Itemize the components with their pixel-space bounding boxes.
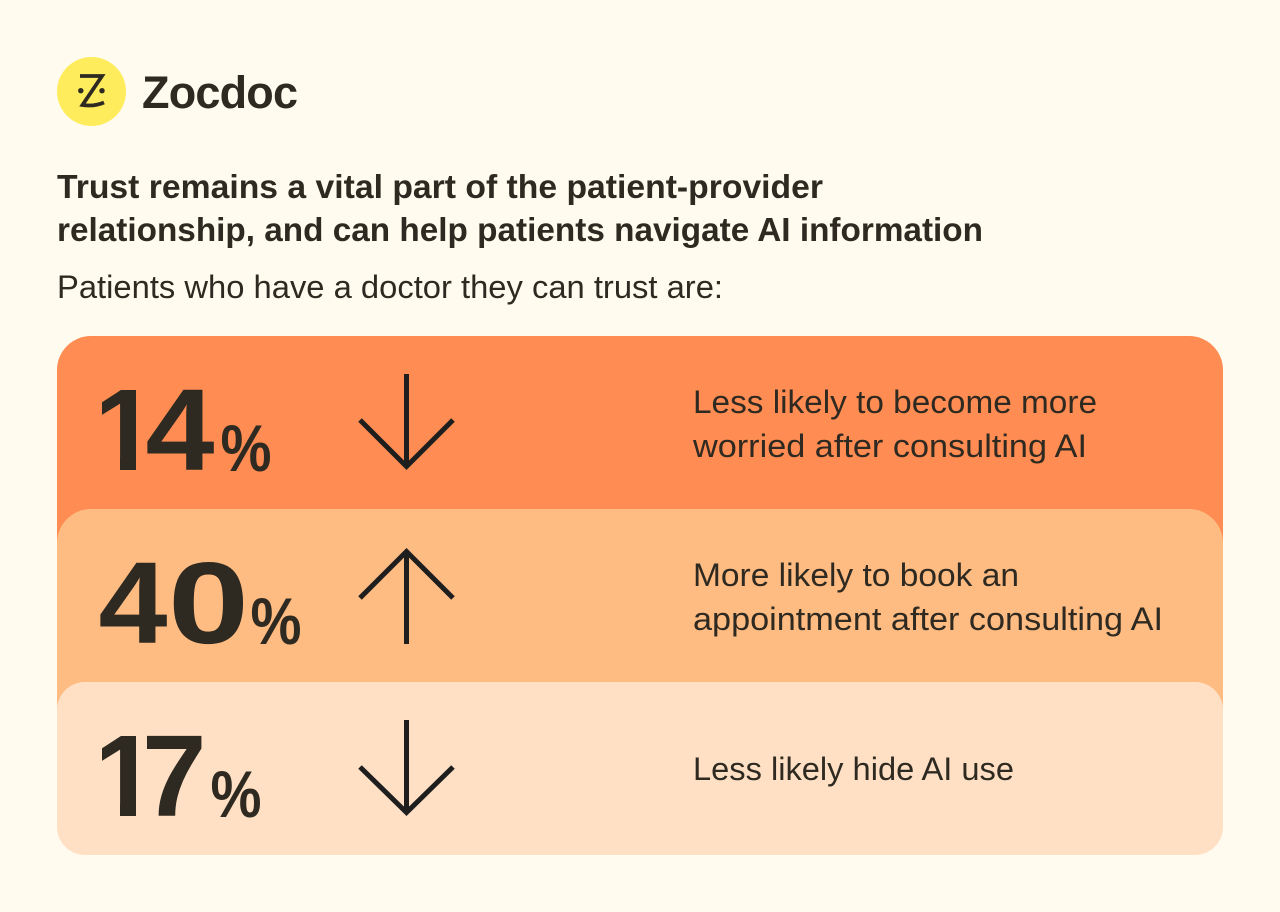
description: worried after consulting AI bbox=[692, 428, 1087, 464]
icon: down arrow bbox=[360, 374, 453, 467]
subheading: Patients who have a doctor they can trust are: bbox=[57, 269, 723, 305]
stat: 17%: 7 bbox=[142, 711, 207, 841]
description bbox=[693, 557, 1163, 637]
panel: 40% more likely to book an appointment bbox=[57, 509, 1223, 769]
heading: Trust remains a vital part of the patient-provider bbox=[57, 169, 823, 206]
logo: Zocdoc bbox=[57, 57, 298, 126]
stat: 17% bbox=[102, 736, 260, 818]
stat: 14%: 1 bbox=[93, 365, 158, 495]
icon: yellow smiley Z circle bbox=[57, 57, 126, 126]
description: appointment after consulting AI bbox=[693, 601, 1163, 637]
wordmark: Zocdoc bbox=[142, 67, 298, 118]
description: More likely to book an bbox=[693, 557, 1019, 593]
stat: 14%: % bbox=[220, 411, 272, 485]
description: Less likely hide AI use bbox=[693, 751, 1014, 787]
heading bbox=[57, 169, 983, 249]
stat: 17%: 1 bbox=[93, 711, 158, 841]
stat: 14% bbox=[102, 390, 270, 472]
stat: 40%: % bbox=[250, 584, 302, 658]
stat: 40% bbox=[98, 538, 302, 668]
heading: relationship, and can help patients navigate AI information bbox=[57, 212, 983, 249]
stat: 17%: % bbox=[210, 757, 262, 831]
stat: 40%: 0 bbox=[168, 538, 249, 668]
icon: up arrow bbox=[360, 551, 453, 644]
stat: 40%: 4 bbox=[98, 538, 168, 668]
panel: 14% less likely to become more worried bbox=[57, 336, 1223, 542]
description: Less likely to become more bbox=[693, 384, 1097, 420]
stat: 14%: 4 bbox=[146, 365, 214, 495]
panel: 17% less likely hide AI use bbox=[57, 682, 1223, 855]
icon: down arrow bbox=[360, 720, 453, 813]
description bbox=[692, 384, 1097, 464]
